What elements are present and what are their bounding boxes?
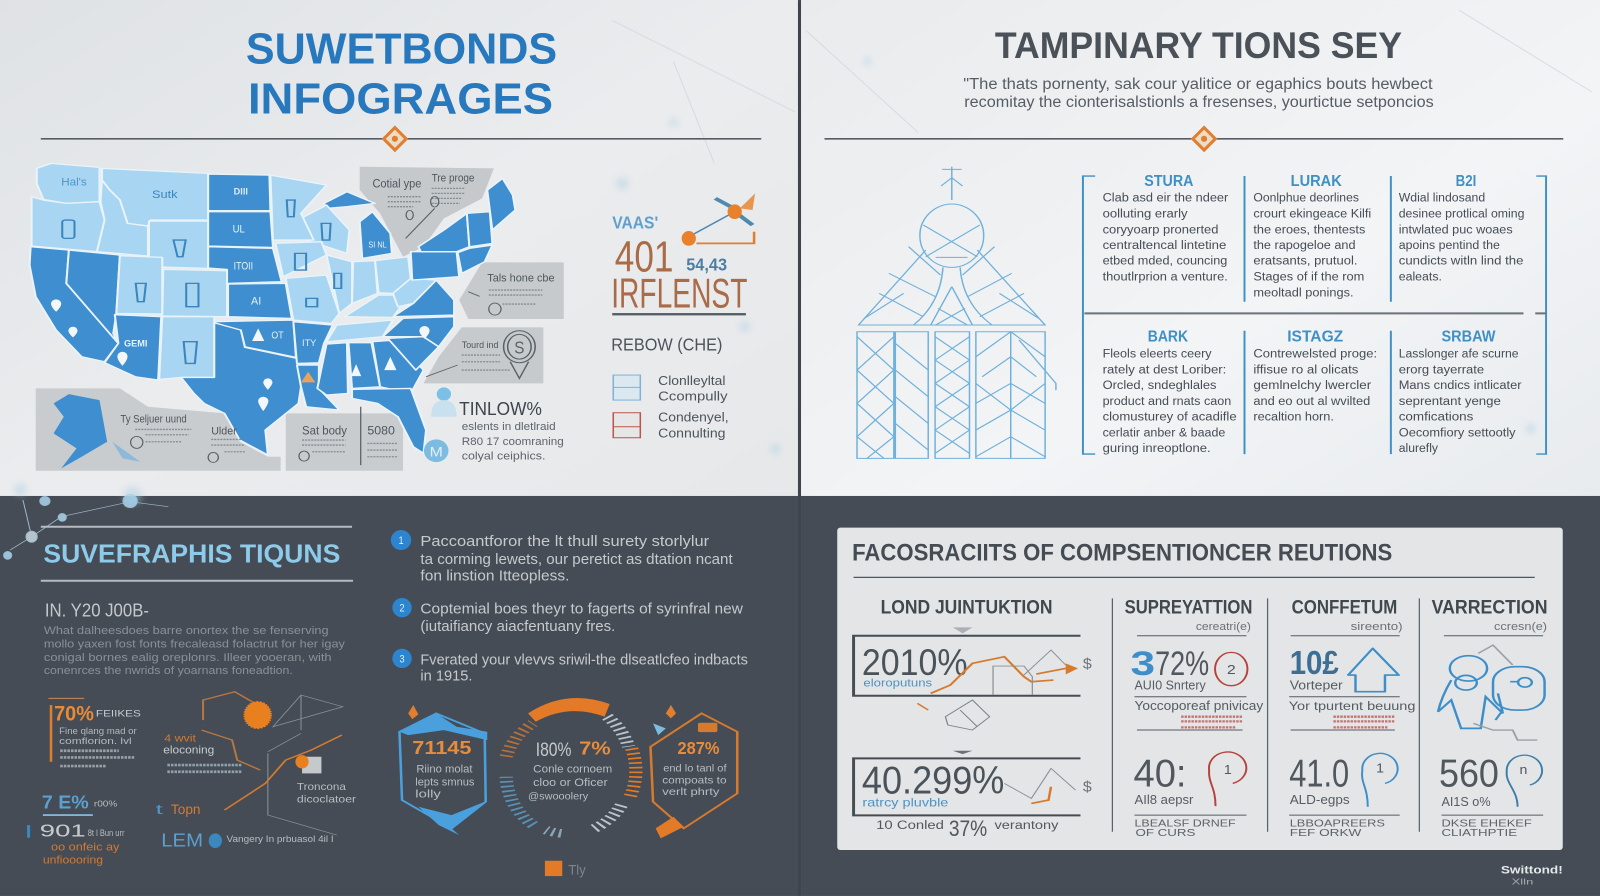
callout: top gray inset (360, 167, 494, 257)
stat: tinlow: colyal ceiphics. (462, 450, 545, 463)
text block: srbaw: comfications (1399, 410, 1474, 424)
column: confetum: Vorteper (1290, 679, 1343, 693)
inset text: Ty Seljuer uund (120, 413, 187, 426)
icon: globe (424, 439, 448, 462)
title: top left: SUWETBONDS (246, 24, 557, 73)
subheading and paragraph: IN. Y20 J00B- (45, 600, 149, 621)
text block: stura (1103, 173, 1228, 284)
subtitle: top right: recomitay the cionterisalstionls a fresenses, yourtictue setponcios (964, 94, 1434, 111)
subheading and paragraph: mollo yaxen fost fonts frecaleasd folactrut for her igay (44, 638, 346, 651)
chart: blue hexagon: 71145 (412, 738, 471, 759)
chart labels: Topn (171, 802, 201, 817)
icon: dollar coin (504, 331, 535, 378)
text block: b2i: ealeats. (1399, 270, 1442, 284)
chart labels: LEM (161, 830, 203, 851)
column: lond juintuktion: LOND JUINTUKTION (881, 597, 1052, 618)
chart: orange hexagon: verlt phrty (662, 786, 720, 797)
callout: alaska inset (36, 388, 281, 471)
stat: orange figures: 54,43 (686, 255, 727, 275)
legend: Clonlleyltal (658, 373, 726, 388)
chart: circular gauge: I80% (536, 739, 571, 761)
subheading and paragraph: What dalheesdoes barre onortex the se fenserving (44, 625, 329, 637)
column: varrection: DKSE EHEKEF (1441, 818, 1532, 829)
panel: bottom left background (0, 496, 799, 896)
chart labels (156, 732, 357, 851)
icon: orange diamond right (1193, 128, 1215, 150)
text block: b2i: Wdial lindosand (1399, 191, 1485, 205)
stat: 70 percent: Fine qlang mad or (59, 726, 137, 736)
inset fine print (135, 188, 542, 457)
legend: orange square: Tly (568, 862, 586, 878)
text block: bark (1103, 329, 1237, 455)
stat: lower left figures: unfioooring (43, 854, 103, 866)
column: supreyattion: AUI0 Snrtery (1134, 679, 1206, 693)
chart: orange hexagon (651, 705, 737, 838)
text block: bark: rately at dest Loriber: (1103, 363, 1226, 377)
column: varrection: 560 (1439, 753, 1499, 795)
text block: istagz: gemlnelchy lwercler (1253, 379, 1371, 392)
heading: suvefraphis tiquns: SUVEFRAPHIS TIQUNS (43, 539, 340, 569)
panel: top right background (801, 0, 1600, 496)
stat: 70 percent (48, 698, 141, 766)
chart labels: 4 wvit (164, 732, 196, 744)
map: state labels: Hal's (61, 176, 87, 188)
list item 1: ta corming lewets, our peretict as dtation ncant (420, 551, 733, 568)
text block: istagz: ISTAGZ (1287, 329, 1343, 346)
column: lond juintuktion: $ (1083, 778, 1092, 795)
icon: globe: M (430, 444, 443, 460)
chart: blue hexagon: lolly (415, 788, 442, 800)
text block: srbaw: Lasslonger afe scurne (1399, 347, 1519, 361)
text block: srbaw: Mans cndics intlicater (1399, 379, 1522, 392)
footer brand: Xlln (1512, 878, 1533, 887)
legend: Connulting (658, 425, 726, 440)
column: confetum: 10£ (1290, 644, 1339, 681)
text block: lurak: eratsants, prutuol. (1253, 254, 1357, 268)
title: top right: TAMPINARY TIONS SEY (995, 25, 1402, 66)
subtitle: top right (963, 76, 1434, 111)
column: varrection: ccresn(e) (1494, 621, 1547, 633)
column: confetum: 41.0 (1289, 753, 1349, 795)
inset text: Tals hone cbe (487, 272, 555, 284)
chart: circular gauge: @swooolery (528, 790, 589, 802)
list item 2: (iutaifiancy aiacfentuany fres. (420, 618, 615, 635)
column: lond juintuktion: 37% (949, 816, 987, 841)
text block: stura: etbed mded, councing (1103, 254, 1227, 268)
column: supreyattion: LBEALSF DRNEF (1134, 818, 1236, 829)
legend: Ccompully (658, 388, 728, 404)
icon: people and speech bubble (1438, 656, 1545, 728)
inset text: Tourd ind (462, 340, 498, 350)
chart: circular gauge: Conle cornoem (533, 763, 612, 776)
text block: bark: Orcled, sndeghlales (1103, 379, 1217, 392)
text block: b2i (1399, 173, 1524, 284)
list item 3: 3 (399, 653, 405, 665)
chart: circular gauge (506, 698, 636, 833)
text block: srbaw: Oecomfiory settootly (1399, 426, 1516, 440)
chart: orange hexagon: end lo tanl of (663, 762, 727, 774)
text block: b2i: cundicts witln lind the (1399, 254, 1523, 268)
text: IRFLENST (611, 271, 747, 317)
list item 1: Paccoantforor the lt thull surety storlylur (420, 533, 710, 550)
subtitle: top right: "The thats pornenty, sak cour yalitice or egaphics bouts hewbect (963, 76, 1433, 93)
chart: orange hexagon: compoats to (662, 774, 727, 786)
text block: bark: Fleols eleerts ceery (1103, 347, 1212, 361)
text block: bark: cerlatir anber & baade (1103, 426, 1225, 440)
footer brand: Swittond! (1501, 864, 1563, 877)
list item 3 (392, 649, 748, 685)
column: lond juintuktion: ratrcy pluvble (862, 796, 948, 810)
column: supreyattion: 3 (1131, 644, 1155, 683)
legend: Condenyel, (658, 409, 729, 425)
panel: comparison card (837, 528, 1563, 850)
stat: tinlow: R80 17 coomraning (462, 436, 564, 448)
inset text: 5080 (367, 425, 395, 438)
legend (611, 334, 729, 440)
brackets and dividers (1083, 176, 1546, 454)
chart: circular gauge: 7% (579, 738, 611, 759)
inset text: Tre proge (432, 172, 474, 185)
text block: bark: guring inreoptlone. (1103, 442, 1211, 455)
text block: istagz: iffisue ro al olicats (1253, 363, 1359, 377)
text block: srbaw: seprentant yenge (1399, 395, 1501, 408)
chart labels: t (156, 802, 163, 817)
map: state labels: UL (233, 223, 245, 235)
text block: b2i: intwlated puc woaes (1399, 223, 1513, 237)
text block: srbaw: alurefly (1399, 442, 1438, 455)
text block: bark: clomusturey of acadifle (1103, 410, 1237, 424)
icon: flag bubble (431, 387, 457, 417)
list item 2: 2 (399, 602, 405, 614)
text block: b2i: apoins pentind the (1399, 239, 1500, 252)
list item 3: Fverated your vlevvs sriwil-the dlseatlcfeo indbacts (420, 652, 748, 669)
title: top left: INFOGRAGES (248, 74, 553, 123)
column: supreyattion: 72% (1155, 644, 1209, 683)
icon: lattice building (857, 167, 1056, 458)
chart: blue hexagon: Riino molat (416, 763, 472, 776)
subheading and paragraph: conenrces the nwrids of yoarnans foneadtion. (44, 665, 293, 677)
inset text: Ulder (211, 425, 237, 438)
list item 2 (392, 598, 744, 635)
icon: orange satellite (682, 193, 755, 246)
map: state labels: DIII (234, 186, 248, 197)
callout: lower inset (286, 413, 403, 471)
column: lond juintuktion: 2010% (862, 642, 968, 683)
column: varrection: AI1S o% (1441, 796, 1491, 809)
text block: stura: centraltencal lintetine (1103, 239, 1226, 252)
stat: 70 percent: comflorion. lvl (59, 736, 132, 746)
column: confetum: Yor tpurtent beuung (1289, 700, 1415, 713)
chart labels: Vangery In prbuasol 4il I (227, 834, 334, 844)
column: varrection: n (1520, 764, 1527, 777)
subheading and paragraph: conigal bornes ealig oreplonrs. Illeer yooeran, with (44, 652, 332, 664)
column: lond juintuktion: 10 Conled (876, 820, 944, 832)
stat: tinlow: TINLOW% (459, 399, 542, 420)
text block: b2i: desinee protlical oming (1399, 207, 1524, 221)
stat: lower left figures: 901 (40, 820, 86, 841)
text block: lurak: the eroes, thentests (1253, 223, 1366, 237)
map: state labels: ITY (302, 338, 316, 348)
column: confetum: sireento) (1351, 621, 1403, 633)
list item 1: fon linstion Itteopless. (420, 568, 569, 585)
column: supreyattion: AIl8 aepsr (1134, 794, 1194, 807)
text block: lurak: meoltadl ponings. (1253, 286, 1354, 300)
stat: lower left figures: oo onfeic ay (51, 841, 119, 853)
chart labels: Troncona (297, 781, 347, 792)
inset text: Cotial ype (372, 178, 421, 191)
map: alaska (54, 394, 107, 468)
chart: blue hexagon (399, 705, 487, 835)
stat: lower left figures: 8t l Bun urr (88, 828, 124, 838)
column: confetum (1289, 597, 1415, 838)
panel: top left background (0, 0, 799, 496)
text block: bark: product and rnats caon (1103, 395, 1231, 408)
column: supreyattion: 2 (1227, 662, 1236, 677)
map: state labels: ITOII (234, 260, 253, 272)
chart: circular gauge: cloo or Oficer (533, 777, 608, 789)
text block: lurak: crourt ekingeace Kilfi (1253, 207, 1371, 221)
column: varrection: CLIATHPTIE (1441, 827, 1517, 838)
list item 1 (391, 530, 733, 585)
map: state labels: AI (251, 295, 261, 307)
text block: stura: coryyoarp pronerted (1103, 223, 1218, 237)
inset text (120, 172, 555, 438)
list item 3: in 1915. (420, 668, 472, 685)
stat: orange figures (611, 213, 747, 317)
map section (30, 163, 755, 471)
column: confetum: 1 (1376, 762, 1384, 776)
text block: srbaw (1399, 329, 1522, 455)
list item 2: Coptemial boes theyr to fagerts of syrinfral new (420, 600, 744, 617)
text block: stura: oolluting erarly (1103, 207, 1188, 221)
icons: map pins and bottles (51, 200, 430, 411)
column: confetum: LBBOAPREERS (1290, 818, 1385, 829)
column: lond juintuktion: $ (1083, 655, 1092, 672)
chart labels: eloconing (163, 744, 214, 756)
stat: orange figures: VAAS' (612, 213, 658, 232)
text block: lurak: Stages of if the rom (1253, 270, 1364, 284)
stat: 70 percent: 70% (54, 701, 94, 725)
legend: orange square (545, 861, 586, 878)
text block: istagz: Contrewelsted proge: (1253, 347, 1377, 361)
chart: orange hexagon: 287% (678, 738, 720, 758)
panel: bottom right background (801, 496, 1600, 896)
icon: dollar coin: S (514, 338, 524, 357)
text block: lurak (1253, 173, 1371, 300)
chart: orange network (202, 692, 343, 835)
inset text: Sat body (302, 425, 347, 438)
text block: istagz: recaltion horn. (1253, 410, 1334, 424)
column: supreyattion: SUPREYATTION (1125, 597, 1252, 618)
title: top left (246, 24, 557, 123)
map: state labels: OT (271, 329, 284, 341)
icon: orange diamond left (384, 128, 406, 150)
stat: tinlow: eslents in dletlraid (462, 421, 556, 433)
text block: b2i: B2I (1456, 173, 1476, 190)
column: supreyattion (1125, 597, 1263, 838)
map: state labels: SI NL (368, 240, 387, 250)
map: hawaii islands (112, 442, 140, 462)
text block: istagz (1253, 329, 1377, 424)
column: lond juintuktion: verantony (995, 820, 1059, 832)
callout: east inset (459, 262, 564, 319)
column: confetum: CONFFETUM (1292, 597, 1397, 618)
text block: lurak: LURAK (1291, 173, 1342, 190)
text block: stura: thoutlrprion a venture. (1103, 270, 1228, 284)
text block: lurak: Oonlphue deorlines (1253, 191, 1359, 205)
map: state labels (61, 176, 387, 349)
column: lond juintuktion (854, 597, 1092, 841)
stat: tinlow (459, 399, 564, 463)
subheading and paragraph (44, 600, 346, 677)
chart: blue hexagon: lepts smnus (415, 776, 474, 788)
map: state labels: GEMI (124, 338, 147, 349)
column: supreyattion: cereatri(e) (1196, 621, 1251, 633)
stat: 70 percent: FEIIKES (96, 708, 141, 719)
column: supreyattion: 1 (1224, 764, 1232, 777)
stat: lower left figures: r00% (94, 800, 117, 809)
footer brand (1501, 864, 1563, 887)
callout: southeast inset (423, 327, 543, 383)
decoration: constellation (4, 494, 168, 559)
text block: srbaw: SRBAW (1441, 329, 1496, 346)
text block: bark: BARK (1148, 329, 1188, 346)
column: lond juintuktion: 40.299% (862, 758, 1004, 802)
list item 1: 1 (398, 535, 404, 546)
stat: lower left figures: 7 E% (42, 792, 89, 813)
column: lond juintuktion: eloroputuns (863, 677, 932, 689)
column: supreyattion: OF CURS (1135, 827, 1195, 838)
stat: lower left figures (29, 792, 124, 866)
column: supreyattion: 40: (1134, 753, 1187, 795)
text block: stura: STURA (1144, 173, 1193, 190)
stat: orange figures: 401 (615, 233, 673, 282)
text block: istagz: and eo out al wvilted (1253, 395, 1370, 408)
text block: stura: Clab asd eir the ndeer (1103, 191, 1228, 205)
text block: lurak: the rapogeloe and (1253, 239, 1356, 252)
column: confetum: ALD-egps (1290, 794, 1350, 807)
column: supreyattion: Yoccoporeaf pnivicay (1134, 700, 1263, 713)
map: state labels: Sutk (152, 189, 178, 200)
map: united states states (30, 163, 515, 455)
column: varrection (1432, 597, 1548, 838)
column: confetum: FEF ORKW (1290, 827, 1362, 838)
chart labels: dicoclatoer (297, 793, 357, 805)
legend: REBOW (CHE) (611, 334, 722, 355)
text block: srbaw: erorg tayerrate (1399, 363, 1484, 377)
